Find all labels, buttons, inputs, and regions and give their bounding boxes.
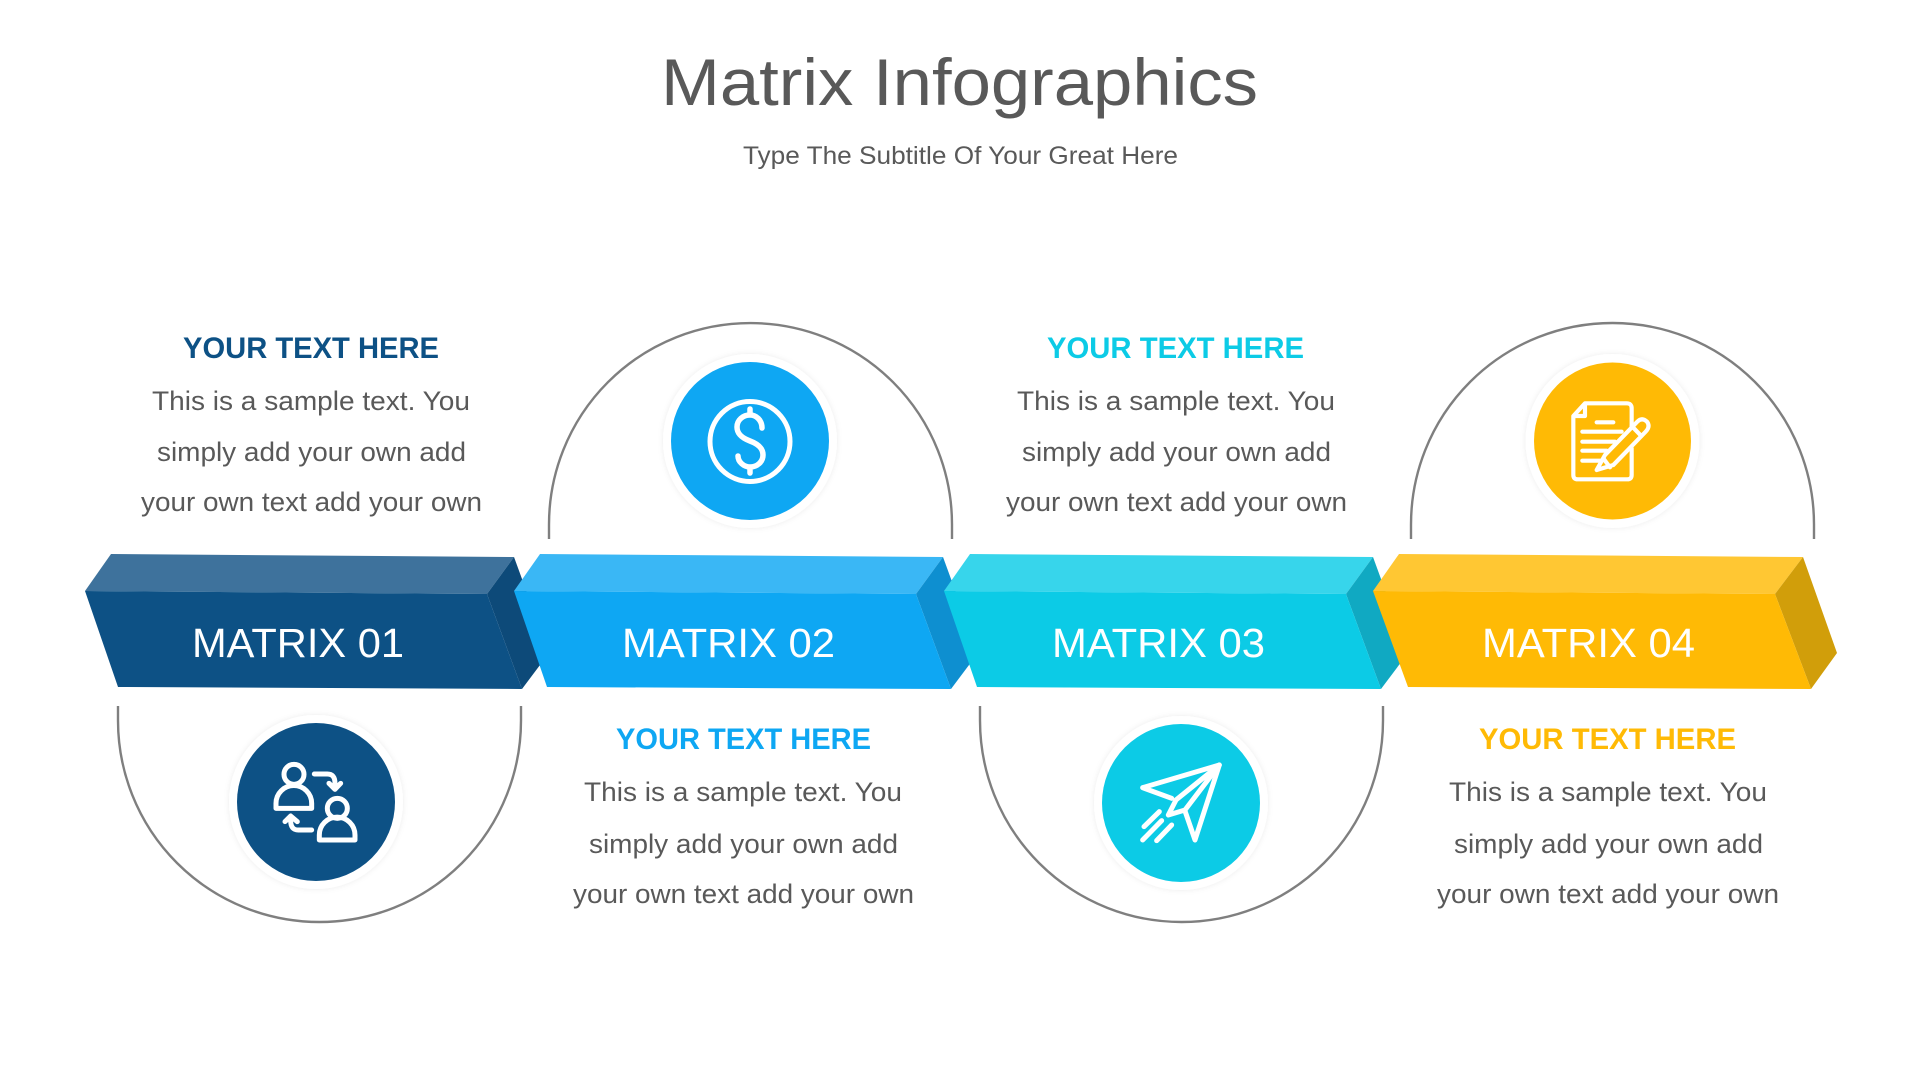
text block: matrix 04 — [1437, 723, 1779, 909]
text block: matrix 02: YOUR TEXT HERE — [616, 723, 871, 756]
banner: matrix 01 — [85, 554, 549, 689]
text block: matrix 03: simply add your own add — [1022, 437, 1331, 467]
text block: matrix 04: This is a sample text. You — [1449, 777, 1767, 807]
banner: matrix 04 — [1373, 554, 1837, 689]
banner: matrix 02 — [514, 554, 978, 689]
label: matrix 01: MATRIX 01 — [192, 620, 404, 666]
text block: matrix 01: your own text add your own — [141, 487, 482, 517]
banner: matrix 03 — [944, 554, 1408, 689]
icon: paper plane — [1094, 716, 1268, 890]
text block: matrix 02: your own text add your own — [573, 879, 914, 909]
text block: matrix 01 — [141, 332, 482, 517]
arc: matrix 04 — [1411, 323, 1814, 539]
text block: matrix 01: YOUR TEXT HERE — [183, 332, 439, 365]
arc: matrix 01 — [118, 706, 521, 922]
text block: matrix 04: your own text add your own — [1437, 879, 1779, 909]
text block: matrix 02: simply add your own add — [589, 829, 898, 859]
text block: matrix 02 — [573, 723, 914, 909]
text block: matrix 04: simply add your own add — [1454, 829, 1763, 859]
label: matrix 02: MATRIX 02 — [622, 620, 835, 666]
text block: matrix 01: This is a sample text. You — [152, 386, 470, 416]
title: Matrix Infographics — [661, 45, 1258, 119]
icon: people exchange — [229, 715, 403, 889]
text block: matrix 03 — [1006, 332, 1347, 517]
subtitle: Type The Subtitle Of Your Great Here — [743, 142, 1178, 170]
text block: matrix 01: simply add your own add — [157, 437, 466, 467]
panel: matrix 02 — [514, 323, 978, 909]
text block: matrix 03: your own text add your own — [1006, 487, 1347, 517]
label: matrix 04: MATRIX 04 — [1482, 620, 1695, 666]
label: matrix 03: MATRIX 03 — [1052, 620, 1265, 666]
panel: matrix 01 — [85, 332, 549, 922]
text block: matrix 03: YOUR TEXT HERE — [1047, 332, 1304, 365]
text block: matrix 03: This is a sample text. You — [1017, 386, 1335, 416]
panel: matrix 03 — [944, 332, 1408, 922]
icon: document and pencil — [1526, 354, 1700, 528]
arc: matrix 02 — [549, 323, 952, 539]
arc: matrix 03 — [980, 706, 1383, 922]
text block: matrix 02: This is a sample text. You — [584, 777, 902, 807]
panel: matrix 04 — [1373, 323, 1837, 909]
text block: matrix 04: YOUR TEXT HERE — [1479, 723, 1736, 756]
icon: dollar coin — [663, 354, 837, 528]
